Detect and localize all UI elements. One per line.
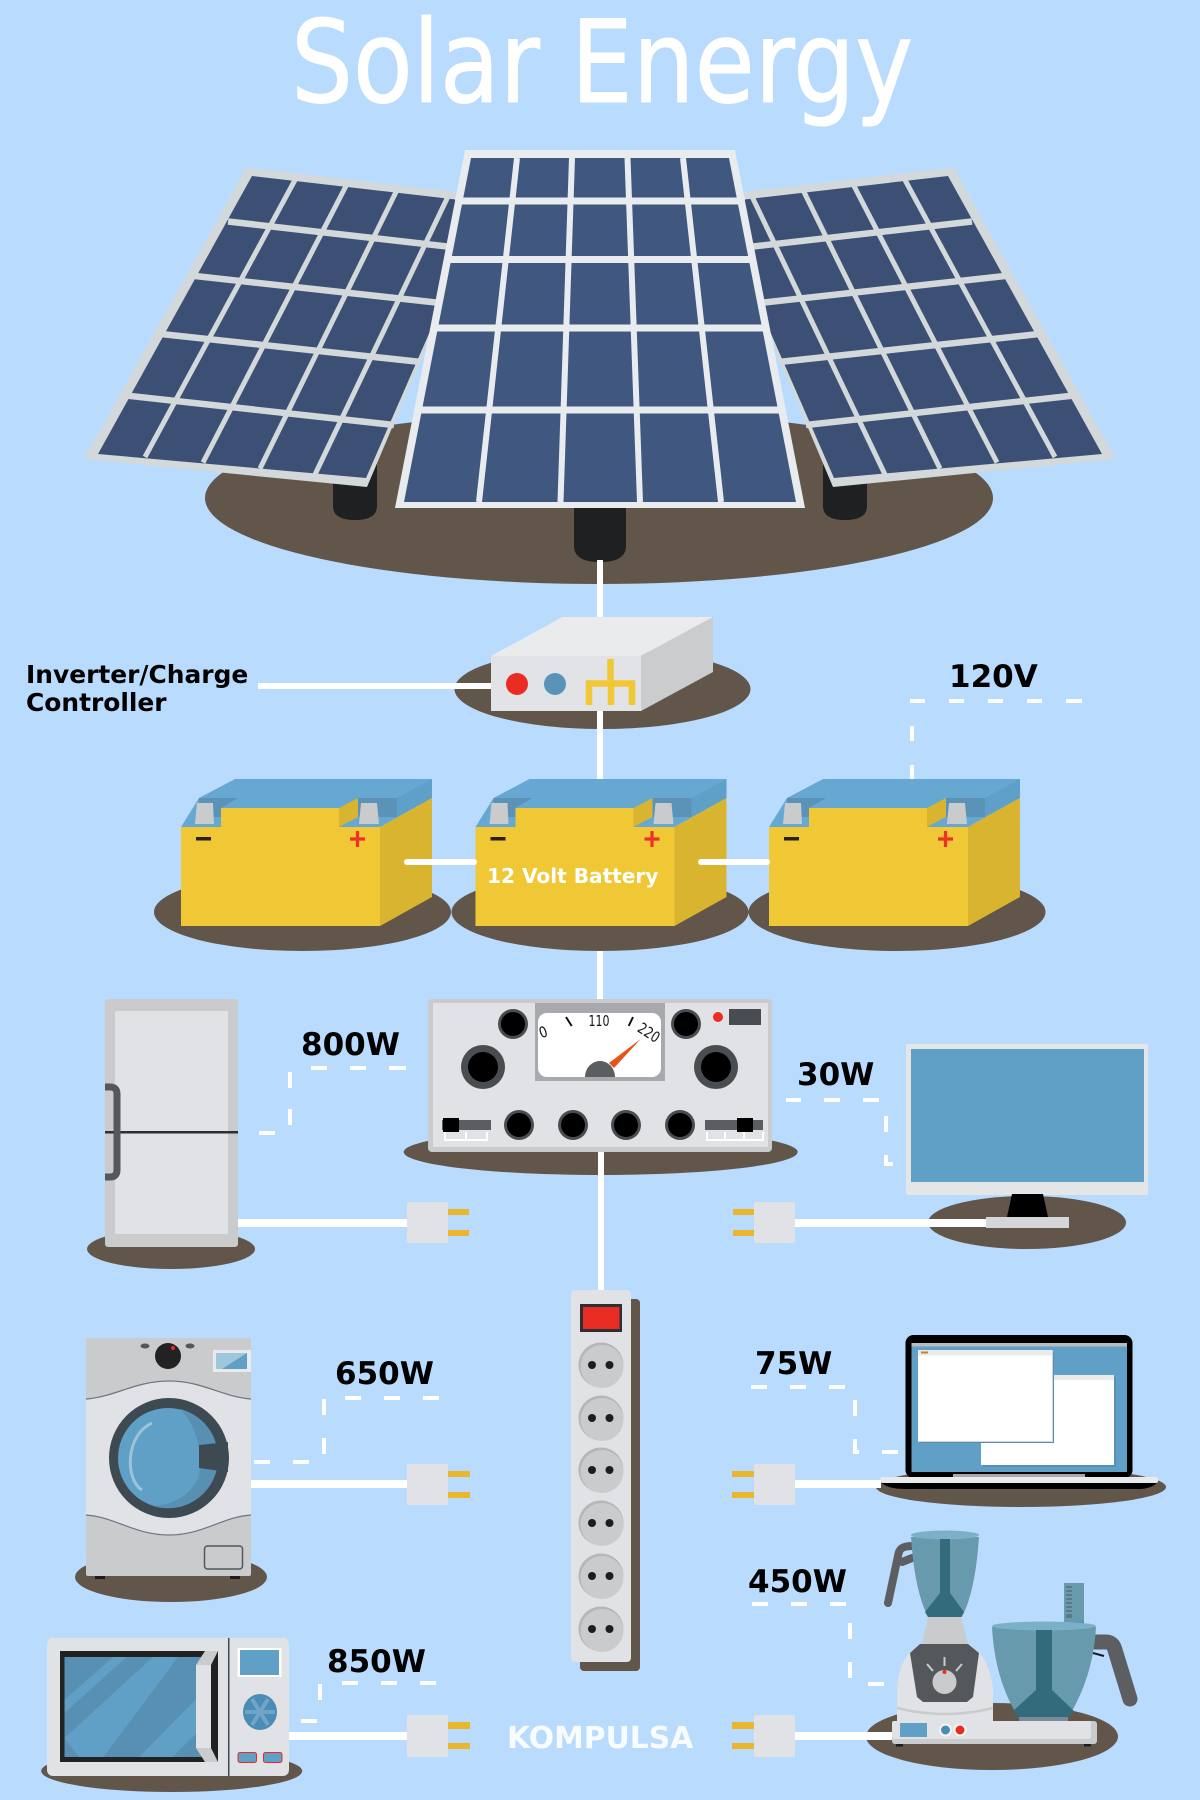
laptop power label: 75W [755,1346,832,1382]
microwave dashed line [301,1683,436,1721]
left post [333,450,377,520]
red indicator [506,673,528,695]
monitor dashed line [786,1100,893,1166]
blender dashed line [752,1604,884,1684]
small display [729,1009,761,1025]
back window [983,1377,1116,1467]
laptop lid [906,1335,1132,1478]
front window [920,1352,1054,1443]
gauge: 0 [536,1022,550,1042]
blender plug [732,1715,892,1757]
inverter box top [491,617,713,656]
blender jar [911,1530,979,1617]
fridge plug [238,1202,469,1243]
dashed line 120V [910,701,1082,779]
main vertical wire [600,560,601,1295]
control panel [910,1644,979,1702]
left solar panel [84,168,490,487]
inverter label line [258,683,491,689]
battery 1 [154,779,451,951]
inverter / charge controller [454,617,750,730]
microwave [41,1638,302,1792]
door [109,1398,229,1518]
voltmeter control panel [404,999,798,1176]
buttons [238,1752,256,1762]
center post [574,490,626,562]
blender neck [922,1617,968,1644]
fridge power label: 800W [301,1027,400,1063]
center solar panel [395,150,805,508]
right post [823,450,867,520]
appliance ground shadow [866,1703,1118,1770]
washer power label: 650W [335,1356,434,1392]
monitor plug [733,1202,986,1243]
motor body [897,1652,993,1722]
ground shadow under panels [205,412,993,584]
meter casing [428,999,772,1152]
battery 2 [452,779,748,951]
washing machine [75,1338,267,1602]
drawer [204,1546,242,1569]
food processor handle [1093,1653,1104,1656]
knobs [461,1009,738,1140]
power switch [580,1304,622,1332]
processor jar [992,1622,1096,1721]
door handle [196,1651,218,1665]
right solar panel [710,168,1116,487]
laptop plug [732,1464,881,1505]
meter ground shadow [404,1129,798,1175]
indicator [713,1012,723,1022]
microwave power label: 850W [327,1644,426,1680]
laptop underside [880,1482,1158,1489]
microwave plug [289,1715,470,1757]
fridge dashed line [259,1068,406,1133]
inverter box front [491,656,641,711]
laptop dashed line [751,1387,898,1454]
processor tube [1064,1583,1084,1627]
control dial [243,1694,277,1730]
inverter label: Inverter/Charge [26,660,248,689]
outlets [578,1342,624,1652]
wire below inverter [597,705,603,730]
base [892,1721,1097,1744]
illustration: solar panel array [84,150,1116,584]
dial [155,1343,181,1369]
gauge [535,1003,665,1081]
sliders [442,1118,763,1140]
inverter label: Controller [26,688,167,717]
battery 3 [748,779,1046,951]
window [60,1651,218,1762]
blender handle [888,1546,913,1603]
blender power label: 450W [748,1564,847,1600]
washer dashed line [254,1398,439,1462]
voltage label 120V: 120V [949,659,1038,695]
gauge: 110 [588,1012,610,1030]
monitor power label: 30W [797,1057,874,1093]
power strip [571,1290,640,1671]
monitor base [986,1217,1069,1228]
laptop [876,1335,1166,1507]
washer plug [251,1464,470,1505]
inverter box side [641,617,713,711]
watermark: KOMPULSA [507,1721,693,1756]
inverter ground shadow [454,649,750,729]
blender and food processor [866,1530,1130,1770]
monitor [906,1044,1148,1249]
blue indicator [544,673,566,695]
control display [238,1648,282,1677]
gauge: 220 [634,1019,663,1047]
refrigerator [87,999,255,1269]
wire across shadow [598,1150,604,1176]
laptop base [953,1474,1085,1477]
battery connectors [404,859,770,865]
battery label: 12 Volt Battery [487,864,658,888]
display [213,1350,251,1372]
yellow symbol [589,659,632,705]
